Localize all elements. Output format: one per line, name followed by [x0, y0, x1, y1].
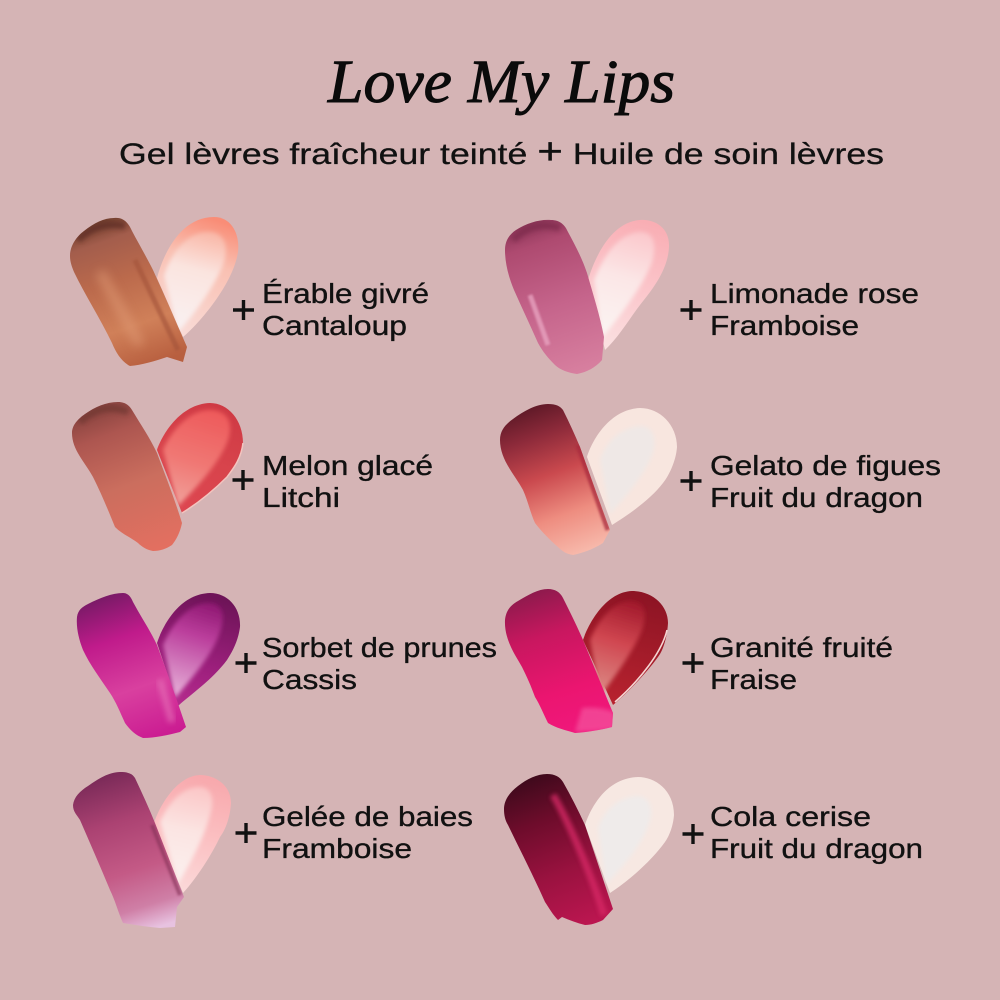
label: Melon glacé / Litchi: Litchi — [262, 482, 340, 513]
label: Melon glacé / Litchi — [262, 450, 433, 513]
plus icon 3 — [232, 470, 254, 490]
label: Granité fruité / Fraise: Granité fruité — [710, 632, 893, 663]
label: Gelato de figues / Fruit du dragon: Gelato de figues — [710, 450, 941, 481]
label: Granité fruité / Fraise — [710, 632, 893, 695]
label: Gelato de figues / Fruit du dragon: Fruit du dragon — [710, 482, 923, 513]
label: Gelée de baies / Framboise — [262, 801, 473, 864]
label: Érable givré / Cantaloup: Érable givré — [262, 278, 429, 309]
label: Sorbet de prunes / Cassis: Cassis — [262, 664, 357, 695]
label: Sorbet de prunes / Cassis: Sorbet de prunes — [262, 632, 497, 663]
swatch: Cola cerise + Fruit du dragon — [504, 774, 674, 925]
label: Limonade rose / Framboise — [710, 278, 919, 341]
label: Érable givré / Cantaloup: Cantaloup — [262, 310, 407, 341]
label: Érable givré / Cantaloup — [262, 278, 429, 341]
label: Limonade rose / Framboise: Limonade rose — [710, 278, 919, 309]
swatch: Limonade rose + Framboise — [505, 220, 669, 374]
label: Gelée de baies / Framboise: Framboise — [262, 833, 412, 864]
label: Sorbet de prunes / Cassis — [262, 632, 497, 695]
label: Cola cerise / Fruit du dragon: Cola cerise — [710, 801, 871, 832]
label: Gelato de figues / Fruit du dragon — [710, 450, 941, 513]
plus icon 1 — [233, 300, 254, 320]
plus icon 5 — [236, 653, 256, 673]
label: Melon glacé / Litchi: Melon glacé — [262, 450, 433, 481]
swatch: Melon glacé + Litchi — [72, 402, 243, 551]
plus icon 4 — [680, 471, 702, 491]
label: Cola cerise / Fruit du dragon: Fruit du dragon — [710, 833, 923, 864]
plus icon 6 — [682, 653, 704, 673]
label: Limonade rose / Framboise: Framboise — [710, 310, 859, 341]
label: Granité fruité / Fraise: Fraise — [710, 664, 797, 695]
subtitle: Gel lèvres fraîcheur teinté + Huile de soin lèvres — [119, 131, 884, 172]
swatch: Sorbet de prunes + Cassis — [77, 593, 240, 738]
plus icon 2 — [680, 300, 702, 320]
label: Gelée de baies / Framboise: Gelée de baies — [262, 801, 473, 832]
swatch: Érable givré + Cantaloup — [70, 217, 238, 366]
title: Love My Lips — [327, 49, 675, 116]
swatch: Granité fruité + Fraise — [505, 589, 668, 733]
plus icon 7 — [236, 823, 256, 843]
label: Cola cerise / Fruit du dragon — [710, 801, 923, 864]
plus icon 8 — [682, 824, 704, 844]
swatch: Gelato de figues + Fruit du dragon — [500, 404, 677, 555]
swatch: Gelée de baies + Framboise — [73, 772, 231, 928]
